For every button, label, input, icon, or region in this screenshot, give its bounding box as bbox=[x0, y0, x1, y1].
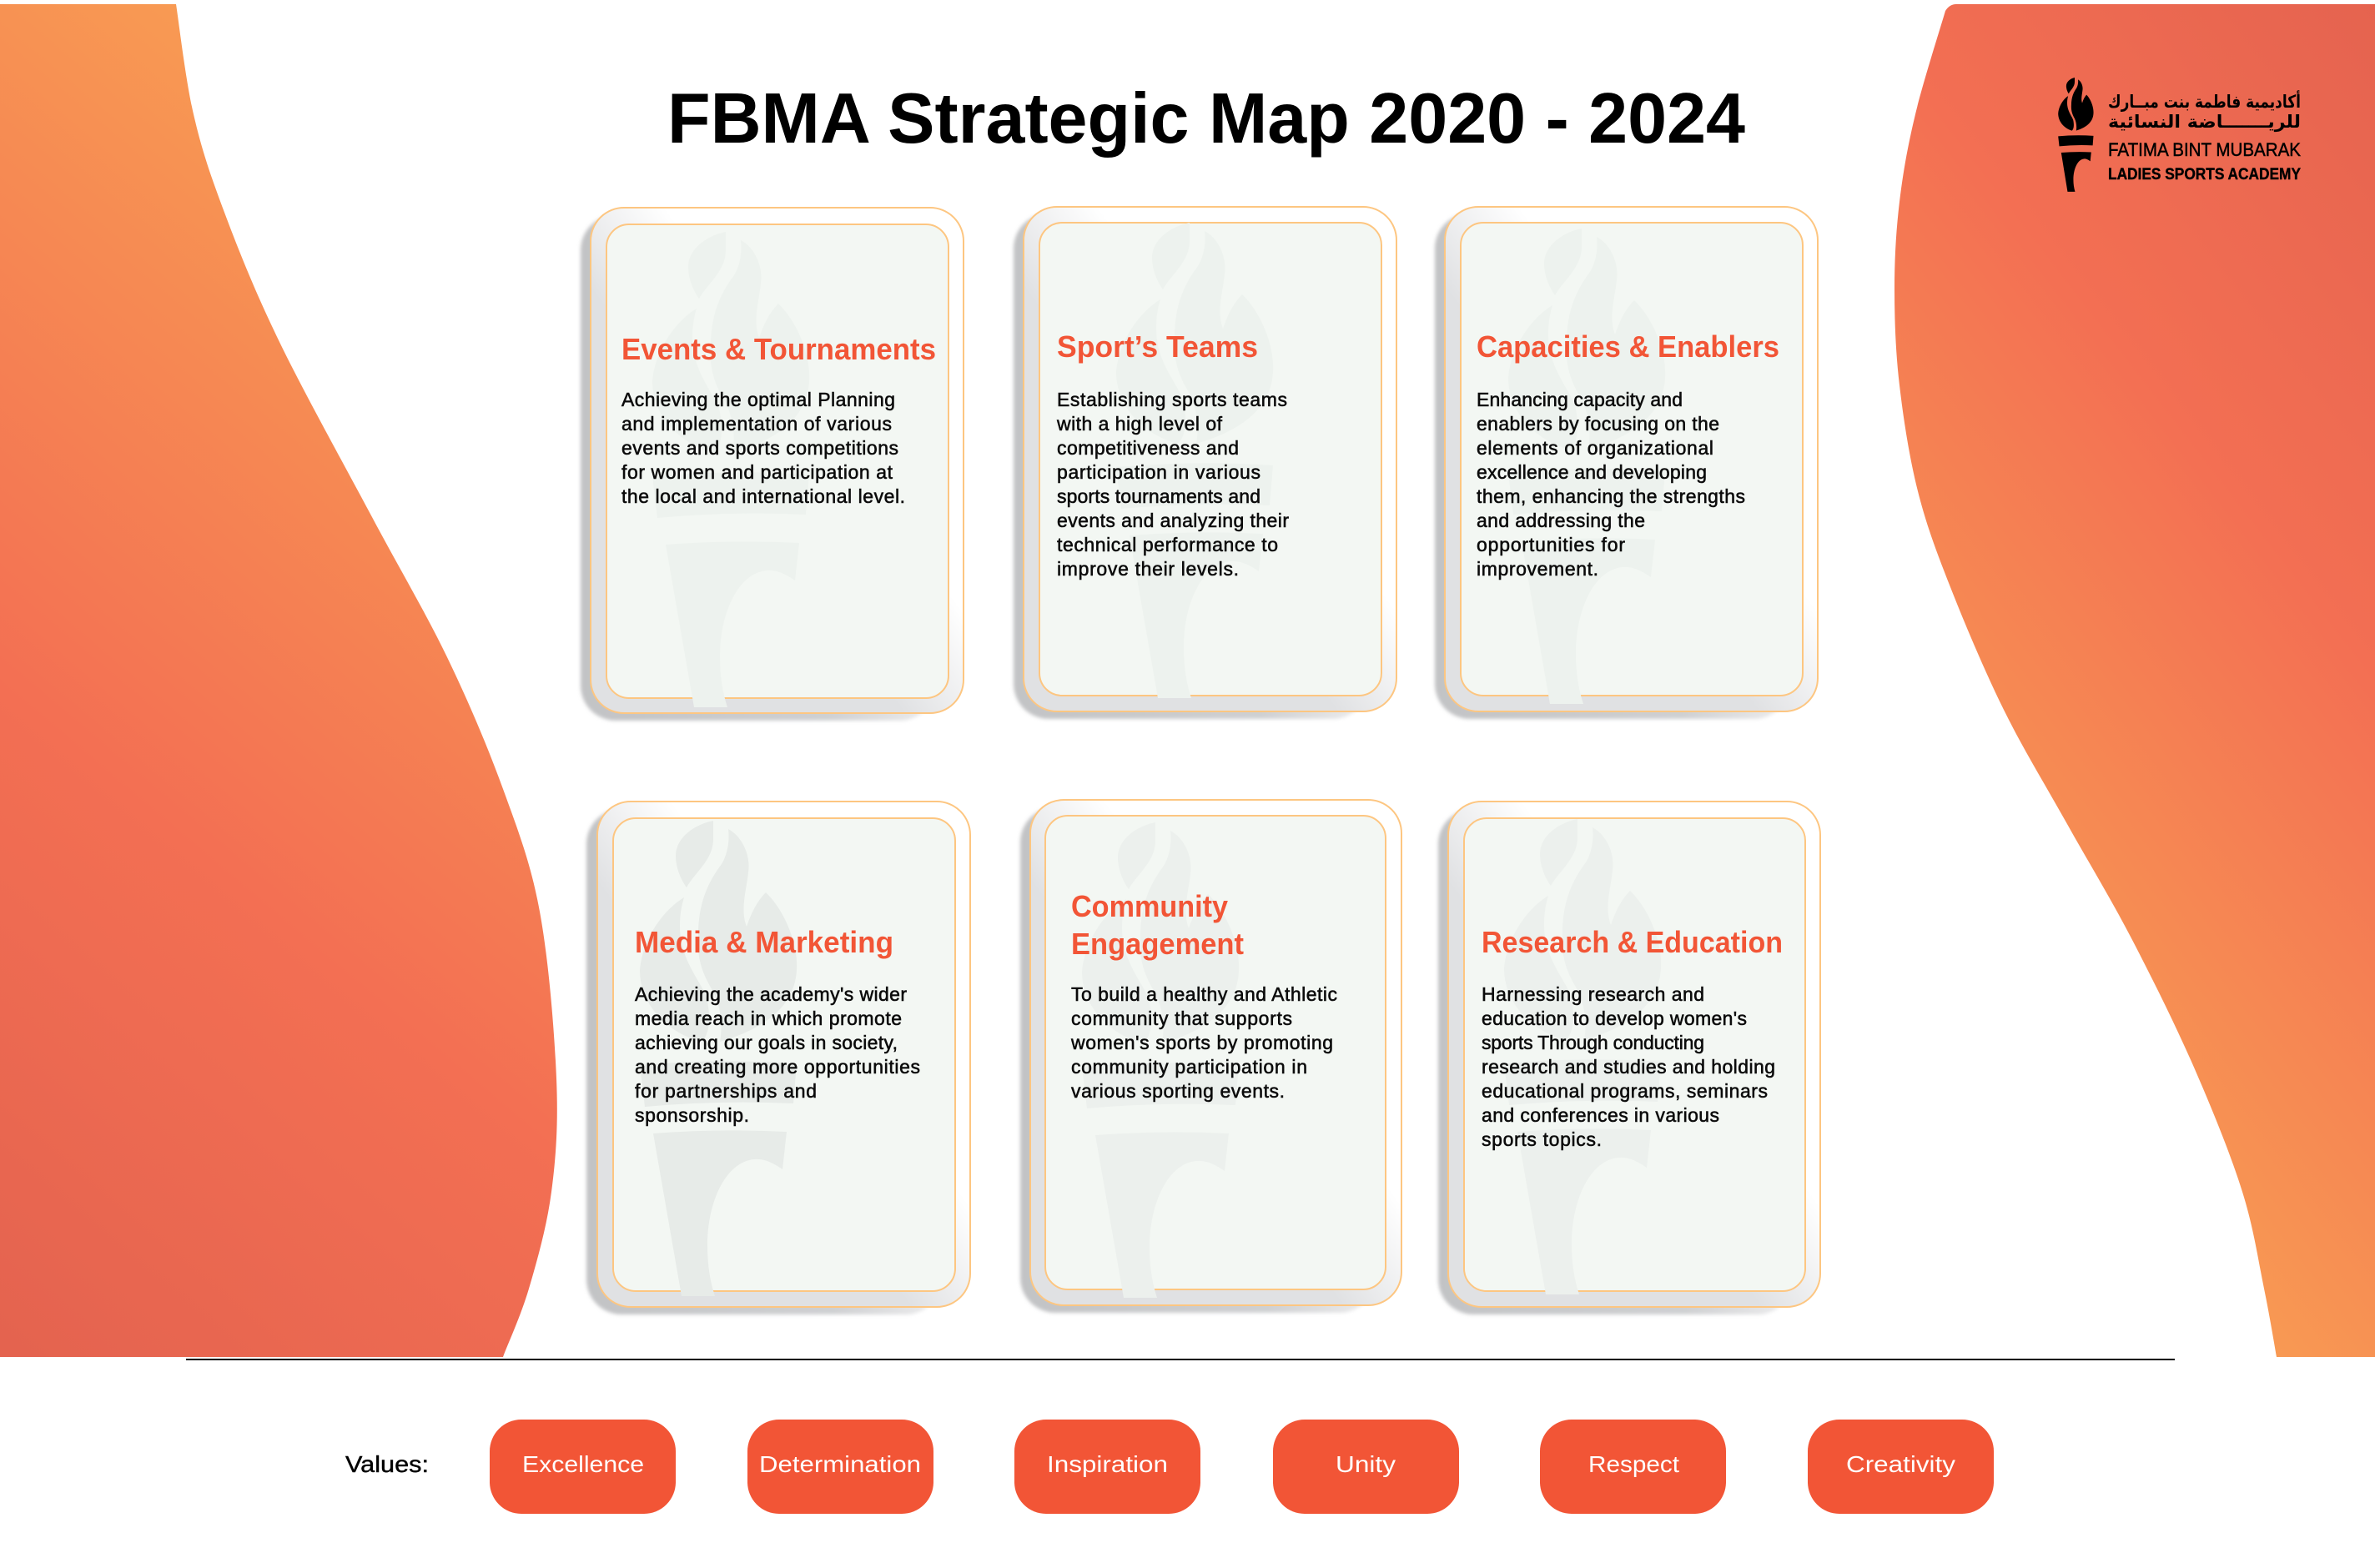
heading: Engagement bbox=[1071, 927, 1244, 961]
text block: community that supports bbox=[1071, 1008, 1292, 1029]
logo english name: LADIES SPORTS ACADEMY bbox=[2108, 166, 2301, 183]
text block: improve their levels. bbox=[1057, 558, 1239, 580]
text block bbox=[621, 389, 905, 507]
logo english name: FATIMA BINT MUBARAK bbox=[2108, 139, 2301, 160]
text block: research and studies and holding bbox=[1482, 1056, 1775, 1078]
text block: various sporting events. bbox=[1071, 1080, 1285, 1102]
panel: Media & Marketing bbox=[586, 802, 970, 1314]
text block: Achieving the optimal Planning bbox=[621, 389, 895, 410]
panel: Research & Education bbox=[1438, 802, 1820, 1314]
value: Determination: Determination bbox=[759, 1451, 921, 1477]
panel: Events & Tournaments bbox=[581, 208, 964, 721]
heading: Sport’s Teams bbox=[1057, 329, 1258, 364]
text block: Enhancing capacity and bbox=[1477, 389, 1683, 410]
text block bbox=[1482, 983, 1775, 1150]
panel: Capacities & Enablers bbox=[1435, 207, 1818, 719]
logo arabic name: أكاديمية فاطمة بنت مبــارك bbox=[2108, 89, 2301, 112]
value: Unity bbox=[1273, 1420, 1459, 1514]
text block: achieving our goals in society, bbox=[635, 1032, 898, 1053]
value: Creativity bbox=[1808, 1420, 1994, 1514]
text block: for women and participation at bbox=[621, 461, 893, 483]
heading bbox=[1071, 889, 1244, 961]
text block: sponsorship. bbox=[635, 1104, 749, 1126]
text block bbox=[1477, 389, 1745, 580]
text block: them, enhancing the strengths bbox=[1477, 485, 1745, 507]
logo bbox=[2058, 78, 2301, 192]
value: Determination bbox=[747, 1420, 933, 1514]
heading: Research & Education bbox=[1482, 925, 1783, 959]
heading: Events & Tournaments bbox=[621, 332, 936, 366]
text block: with a high level of bbox=[1056, 413, 1223, 435]
text block bbox=[635, 983, 920, 1126]
text block: media reach in which promote bbox=[635, 1008, 902, 1029]
text block: opportunities for bbox=[1477, 534, 1625, 555]
text block: excellence and developing bbox=[1477, 461, 1707, 483]
value: Excellence bbox=[490, 1420, 676, 1514]
text block: education to develop women's bbox=[1482, 1008, 1747, 1029]
text block: enablers by focusing on the bbox=[1477, 413, 1719, 435]
text block: events and sports competitions bbox=[621, 437, 898, 459]
logo arabic name bbox=[2108, 89, 2301, 132]
text block: and conferences in various bbox=[1482, 1104, 1719, 1126]
text block: elements of organizational bbox=[1477, 437, 1713, 459]
text block: sports Through conducting bbox=[1482, 1032, 1704, 1053]
text block: and addressing the bbox=[1477, 510, 1645, 531]
text block: Achieving the academy's wider bbox=[635, 983, 907, 1005]
text block bbox=[1070, 983, 1337, 1102]
icon: torch bbox=[2058, 78, 2094, 192]
text block: events and analyzing their bbox=[1057, 510, 1289, 531]
text block: To build a healthy and Athletic bbox=[1071, 983, 1337, 1005]
right orange wave bbox=[1894, 4, 2375, 1357]
text block: sports topics. bbox=[1482, 1128, 1602, 1150]
text block: sports tournaments and bbox=[1057, 485, 1260, 507]
logo english name bbox=[2108, 139, 2301, 183]
panel: Sport's Teams bbox=[1014, 207, 1396, 719]
text block: for partnerships and bbox=[635, 1080, 817, 1102]
text block: improvement. bbox=[1477, 558, 1598, 580]
heading: Capacities & Enablers bbox=[1477, 329, 1779, 364]
value: Excellence: Excellence bbox=[522, 1451, 644, 1477]
text block: community participation in bbox=[1071, 1056, 1307, 1078]
value: Inspiration: Inspiration bbox=[1047, 1451, 1168, 1477]
text block: Establishing sports teams bbox=[1057, 389, 1287, 410]
value: Respect: Respect bbox=[1588, 1451, 1679, 1477]
divider rule bbox=[186, 1359, 2175, 1360]
values label: Values: bbox=[345, 1451, 429, 1477]
text block: women's sports by promoting bbox=[1070, 1032, 1333, 1053]
value: Unity: Unity bbox=[1336, 1451, 1396, 1477]
value: Respect bbox=[1540, 1420, 1726, 1514]
title: FBMA Strategic Map 2020 - 2024 bbox=[667, 79, 1745, 158]
heading: Media & Marketing bbox=[635, 925, 893, 959]
text block: and creating more opportunities bbox=[635, 1056, 920, 1078]
text block: the local and international level. bbox=[621, 485, 905, 507]
text block: technical performance to bbox=[1057, 534, 1278, 555]
heading: Community bbox=[1071, 889, 1228, 923]
text block: and implementation of various bbox=[621, 413, 892, 435]
logo arabic name: للريـــــــاضة النسائية bbox=[2108, 112, 2301, 132]
text block: educational programs, seminars bbox=[1482, 1080, 1768, 1102]
left orange wave bbox=[0, 4, 557, 1357]
text block: competitiveness and bbox=[1057, 437, 1239, 459]
panel: Community Engagement bbox=[1020, 800, 1401, 1313]
text block bbox=[1056, 389, 1289, 580]
value: Inspiration bbox=[1014, 1420, 1200, 1514]
text block: participation in various bbox=[1057, 461, 1260, 483]
text block: Harnessing research and bbox=[1482, 983, 1704, 1005]
value: Creativity: Creativity bbox=[1846, 1451, 1955, 1477]
